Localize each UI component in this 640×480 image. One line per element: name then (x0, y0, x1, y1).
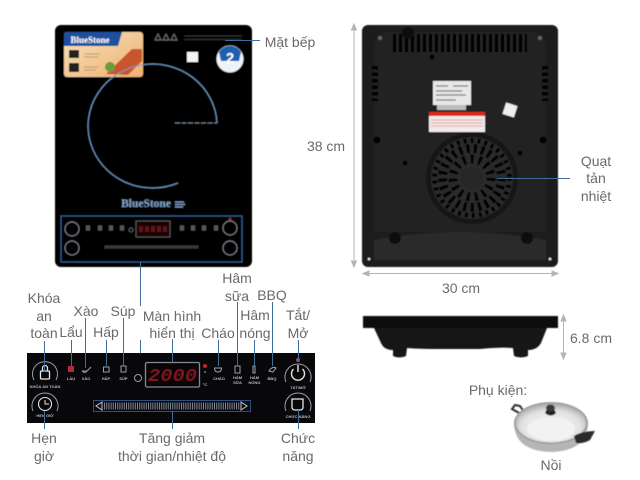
side view of cooktop (363, 316, 558, 358)
label: Khóa an toàn (28, 290, 61, 341)
button: lock: KHÓA AN TOÀN (30, 384, 60, 389)
small white sticker (502, 102, 518, 118)
cooktop top view (55, 25, 252, 267)
label: Nồi: Nồi (540, 457, 562, 473)
promo sticker: BlueStone (70, 35, 110, 45)
mode icons right: NÓNG (248, 380, 260, 385)
white square sticker (187, 52, 198, 62)
connector: cooktop to panel (140, 262, 142, 353)
mode icons right: CHÁO (213, 376, 225, 381)
warranty badge (216, 46, 244, 72)
dimension arrow: width (363, 271, 558, 276)
label: Hâm nóng (239, 307, 271, 341)
brand logo: BlueStone (121, 198, 171, 210)
promo sticker (64, 32, 143, 77)
label: Quạt tản nhiệt (581, 153, 611, 204)
label: Tắt/Mở (286, 307, 310, 341)
button: timer (32, 393, 58, 418)
label: Hẹn giờ (31, 430, 57, 464)
display indicators (203, 364, 207, 387)
mode icons right: HÂM (233, 375, 243, 380)
mode icons right: HÂM (250, 375, 260, 380)
label: Súp: Súp (111, 303, 136, 319)
label: Xào: Xào (74, 303, 99, 319)
label: Màn hình hiển thị: hiển thị (149, 325, 195, 341)
side vents (375, 66, 545, 101)
control panel enlarged (27, 353, 315, 423)
connector: Quạt tản nhiệt (497, 178, 570, 180)
label: Chức năng (281, 430, 315, 464)
mode icons right: SỮA (233, 380, 242, 385)
label: Màn hình hiển thị: Màn hình (143, 308, 201, 324)
label: Chức năng: Chức (281, 430, 315, 446)
mode icons left: HẤP (102, 376, 111, 381)
mode icons right (213, 366, 276, 385)
label: Lẩu: Lẩu (59, 324, 83, 340)
digital display: 2000 (148, 367, 197, 387)
button: lock (30, 362, 60, 389)
timer indicator icon (134, 374, 142, 382)
mode icons left: SÚP (119, 376, 128, 381)
button: power (285, 358, 311, 390)
mode icons left (67, 366, 128, 381)
connector: Mặt bếp (225, 40, 260, 42)
temperature and time slider (94, 400, 250, 412)
screws and feet (374, 36, 546, 244)
button: power: TẮT/MỞ (290, 385, 306, 390)
label: Tăng giảm thời gian/nhiệt độ (118, 430, 226, 464)
label: BBQ: BBQ (257, 287, 287, 303)
label: Khóa an toàn: Khóa (28, 290, 61, 306)
connector lines to control panel (44, 302, 298, 429)
cooling fan grille (426, 132, 518, 224)
label: Hâm nóng: nóng (239, 325, 271, 341)
label: Tắt/Mở: Tắt/ (286, 307, 310, 323)
button: timer: HẸN GIỜ (36, 413, 54, 418)
rear view of cooktop (362, 25, 558, 267)
pot accessory (512, 402, 595, 452)
dimension arrow: depth (561, 315, 566, 359)
label: Tăng giảm thời gian/nhiệt độ: Tăng giảm (139, 430, 205, 446)
vent slots (393, 34, 527, 52)
cooking zone ring (88, 64, 217, 188)
label: Hâm sữa (222, 270, 252, 304)
label: 6.8 cm: 6.8 cm (570, 330, 612, 346)
digital display (146, 362, 200, 387)
label: Hâm nóng: Hâm (240, 307, 270, 323)
label: Quạt tản nhiệt: tản (586, 170, 606, 186)
label: Hẹn giờ: giờ (34, 448, 54, 464)
label: Mặt bếp: Mặt bếp (265, 34, 316, 50)
label: Tắt/Mở: Mở (288, 325, 308, 341)
mode icons right: BBQ (268, 376, 276, 381)
dimension arrow: height (352, 24, 356, 267)
mode icons left: XÀO (82, 376, 90, 381)
label: 30 cm: 30 cm (442, 280, 480, 296)
mini control panel (61, 216, 242, 262)
label: Màn hình hiển thị (143, 308, 201, 341)
label: Hẹn giờ: Hẹn (31, 430, 57, 446)
warning triangles (155, 34, 177, 40)
button: function (285, 393, 311, 419)
warranty badge: 2 (226, 50, 234, 67)
label: Chức năng: năng (282, 448, 314, 464)
product label (433, 81, 471, 105)
label: Khóa an toàn: an (36, 308, 52, 324)
label: Hâm sữa: sữa (225, 288, 249, 304)
label: Phụ kiện: Phụ kiện: (469, 382, 527, 398)
label: Hâm sữa: Hâm (222, 270, 252, 286)
mode icons left: LẨU (67, 376, 75, 381)
label: 38 cm: 38 cm (307, 138, 345, 154)
label: Tăng giảm thời gian/nhiệt độ: thời gian/nhiệt độ (118, 448, 226, 464)
label: Cháo: Cháo (201, 325, 235, 341)
display indicators: °C (203, 382, 207, 387)
warning label (429, 112, 485, 132)
label: Quạt tản nhiệt: Quạt (581, 153, 611, 169)
label: Quạt tản nhiệt: nhiệt (581, 188, 611, 204)
label: Khóa an toàn: toàn (30, 325, 58, 341)
label: Hấp: Hấp (93, 324, 119, 340)
button: function: CHỨC NĂNG (286, 414, 310, 419)
